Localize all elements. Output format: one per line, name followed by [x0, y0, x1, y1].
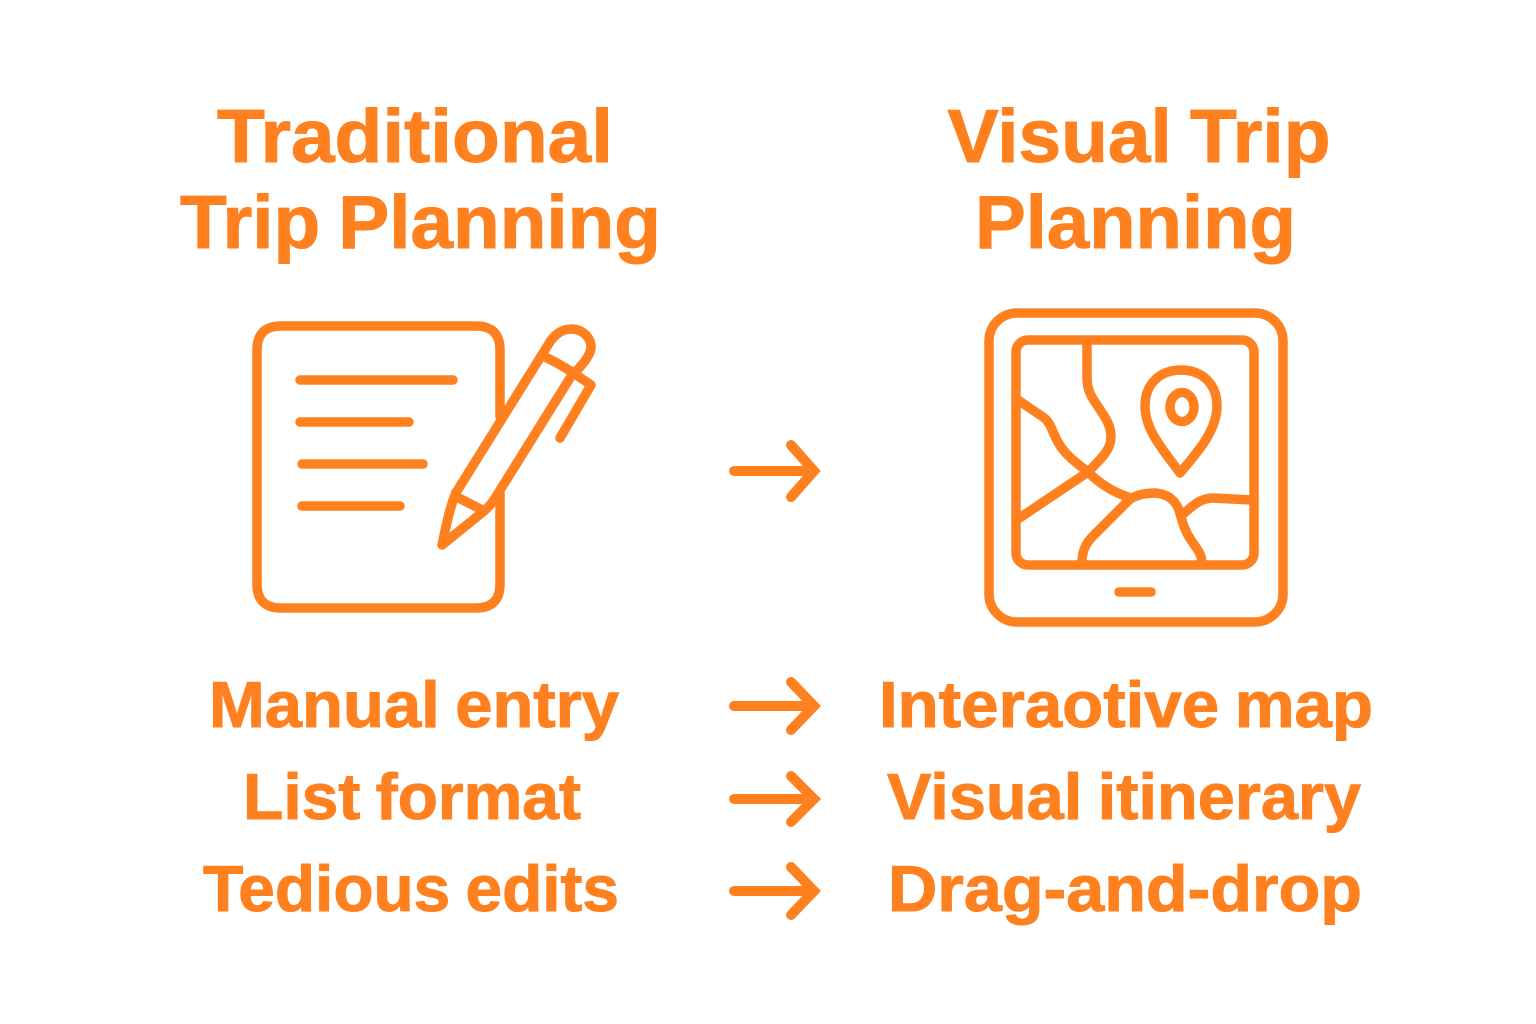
heading: Visual Trip Planning: Visual Trip — [948, 94, 1330, 178]
left list: traditional features: List format — [243, 760, 581, 833]
arrow: manual entry to interactive map — [734, 682, 814, 730]
left list: traditional features: Tedious edits — [203, 852, 619, 925]
right list: visual features: Drag-and-drop — [888, 852, 1362, 925]
left list: traditional features — [203, 668, 619, 925]
heading: Visual Trip Planning — [948, 94, 1330, 264]
heading: Traditional Trip Planning: Trip Planning — [180, 180, 661, 264]
right list: visual features: Interaotive map — [879, 668, 1373, 741]
heading: Visual Trip Planning: Planning — [975, 180, 1296, 264]
right list: visual features — [879, 668, 1373, 925]
arrow: list format to visual itinerary — [734, 776, 814, 822]
heading: Traditional Trip Planning: Traditional — [217, 94, 613, 178]
icon: document and pencil — [257, 326, 591, 608]
arrow: tedious edits to drag-and-drop — [734, 867, 814, 915]
left list: traditional features: Manual entry — [209, 668, 619, 741]
arrow: icons — [734, 445, 814, 497]
right list: visual features: Visual itinerary — [887, 760, 1361, 833]
icon: tablet with map — [989, 313, 1283, 622]
heading: Traditional Trip Planning — [180, 94, 661, 264]
